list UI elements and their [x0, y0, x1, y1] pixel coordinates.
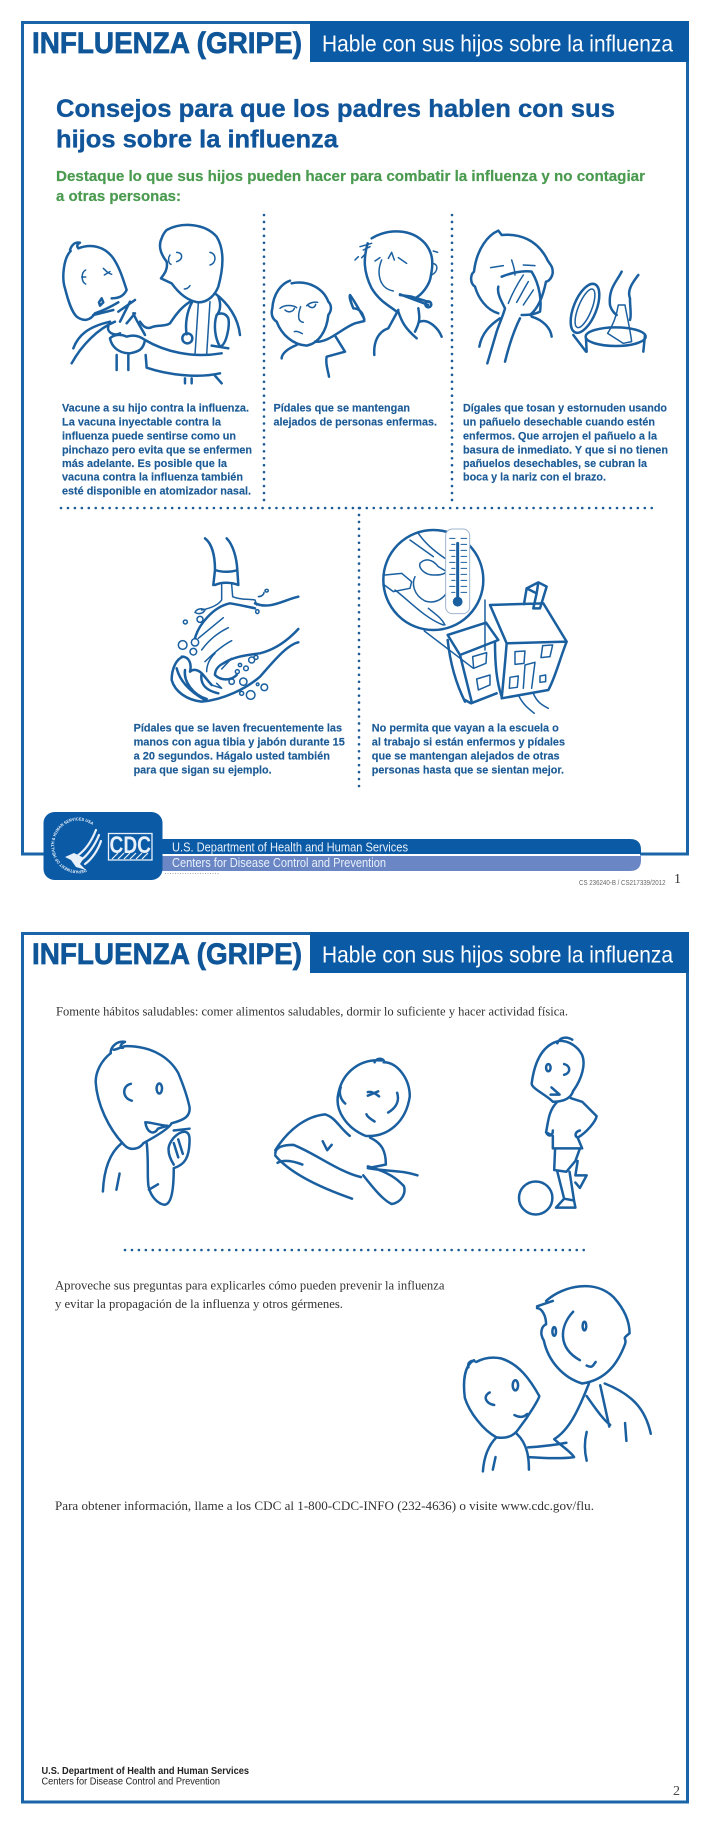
- text: stay home: No permita que vayan a la escuela o: [372, 723, 559, 735]
- text: use questions: [55, 1278, 445, 1311]
- icon: child being vaccinated by doctor: [63, 225, 240, 383]
- green subheading: Destaque lo que sus hijos pueden hacer para combatir la influenza y no contagiar: [56, 168, 645, 185]
- title: hijos sobre la influenza: [56, 126, 339, 154]
- header band page 2: INFLUENZA (GRIPE): [32, 938, 302, 971]
- text: wash hands: [134, 723, 345, 776]
- icon: child sneezing into tissue and trash bin: [471, 231, 646, 363]
- text: healthy habits: Fomente hábitos saludables: comer alimentos saludables, dormir lo suficiente y hacer actividad física.: [56, 1004, 568, 1019]
- text: vaccinate: La vacuna inyectable contra la: [62, 417, 222, 429]
- icon: boy sleeping: [275, 1059, 417, 1204]
- footer text page 2: Centers for Disease Control and Prevention: [42, 1777, 220, 1788]
- text: wash hands: a 20 segundos. Hágalo usted también: [134, 750, 330, 762]
- text: wash hands: Pídales que se laven frecuentemente las: [134, 723, 342, 735]
- green subheading: [56, 168, 645, 205]
- wordmark: CDC: CDC: [110, 832, 151, 859]
- icon: hands washing under faucet: [172, 538, 298, 702]
- text: stay away: [274, 403, 437, 429]
- icon: father talking with son: [464, 1286, 651, 1471]
- header band page 2: [32, 932, 689, 973]
- text: cough and sneeze: enfermos. Que arrojen el pañuelo a la: [463, 430, 658, 442]
- publication code: CS 236240-B / CS217339/2012: [579, 880, 666, 887]
- text: use questions: Aproveche sus preguntas para explicarles cómo pueden prevenir la influenza: [55, 1278, 445, 1292]
- text: stay away: alejados de personas enfermas.: [274, 417, 437, 429]
- text: cough and sneeze: boca y la nariz con el brazo.: [463, 472, 606, 484]
- text: vaccinate: pinchazo pero evita que se enfermen: [62, 444, 252, 456]
- text: cough and sneeze: basura de inmediato. Y que si no tienen: [463, 444, 668, 456]
- text: cough and sneeze: Dígales que tosan y estornuden usando: [463, 403, 667, 415]
- text: wash hands: para que sigan su ejemplo.: [134, 764, 272, 776]
- page number 2: 2: [673, 1784, 680, 1799]
- text: cough and sneeze: pañuelos desechables, se cubran la: [463, 458, 648, 470]
- title: Consejos para que los padres hablen con sus: [56, 95, 615, 123]
- icon: boy eating: [96, 1042, 190, 1205]
- text: stay home: personas hasta que se sientan mejor.: [372, 764, 564, 776]
- header band page 1: [32, 21, 689, 62]
- text: vaccinate: más adelante. Es posible que la: [62, 458, 228, 470]
- footer band with agency names: U.S. Department of Health and Human Services: [172, 840, 408, 855]
- header band page 1: Hable con sus hijos sobre la influenza: [322, 30, 673, 56]
- footer band with agency names: Centers for Disease Control and Prevention: [172, 855, 386, 870]
- title: [56, 95, 615, 154]
- icon: house with sick child and thermometer: [383, 529, 567, 713]
- text: more information: Para obtener información, llame a los CDC al 1-800-CDC-INFO (232-4636) o visite www.cdc.gov/flu.: [55, 1498, 594, 1513]
- text: vaccinate: influenza puede sentirse como un: [62, 430, 236, 442]
- header band page 1: INFLUENZA (GRIPE): [32, 27, 302, 60]
- footer band with agency names: [160, 839, 641, 871]
- text: use questions: y evitar la propagación de la influenza y otros gérmenes.: [55, 1296, 343, 1311]
- icon: boy playing soccer: [519, 1038, 597, 1214]
- green subheading: a otras personas:: [56, 188, 181, 205]
- header band page 2: Hable con sus hijos sobre la influenza: [322, 942, 673, 968]
- footer text page 2: U.S. Department of Health and Human Services: [42, 1766, 249, 1777]
- text: vaccinate: Vacune a su hijo contra la influenza.: [62, 403, 249, 415]
- seal: HHS eagle: DEPARTMENT OF HEALTH & HUMAN SERVICES USA: [51, 818, 94, 874]
- text: stay away: Pídales que se mantengan: [274, 403, 410, 415]
- panel: page 2: [22, 932, 689, 1802]
- page number 1: 1: [674, 872, 681, 887]
- text: vaccinate: [62, 403, 252, 498]
- logo: HHS and CDC: [44, 812, 162, 880]
- text: cough and sneeze: [463, 403, 668, 484]
- panel: page 1: [21, 21, 689, 887]
- text: wash hands: manos con agua tibia y jabón durante 15: [134, 737, 345, 749]
- text: stay home: [372, 723, 565, 776]
- text: stay home: al trabajo si están enfermos y pídales: [372, 737, 565, 749]
- text: stay home: que se mantengan alejados de otras: [372, 750, 560, 762]
- text: vaccinate: vacuna contra la influenza también: [62, 472, 243, 484]
- footer text page 2: [42, 1766, 249, 1788]
- text: cough and sneeze: un pañuelo desechable cuando estén: [463, 417, 655, 429]
- icon: boy keeping away from sick man: [272, 231, 442, 377]
- text: vaccinate: esté disponible en atomizador nasal.: [62, 486, 251, 498]
